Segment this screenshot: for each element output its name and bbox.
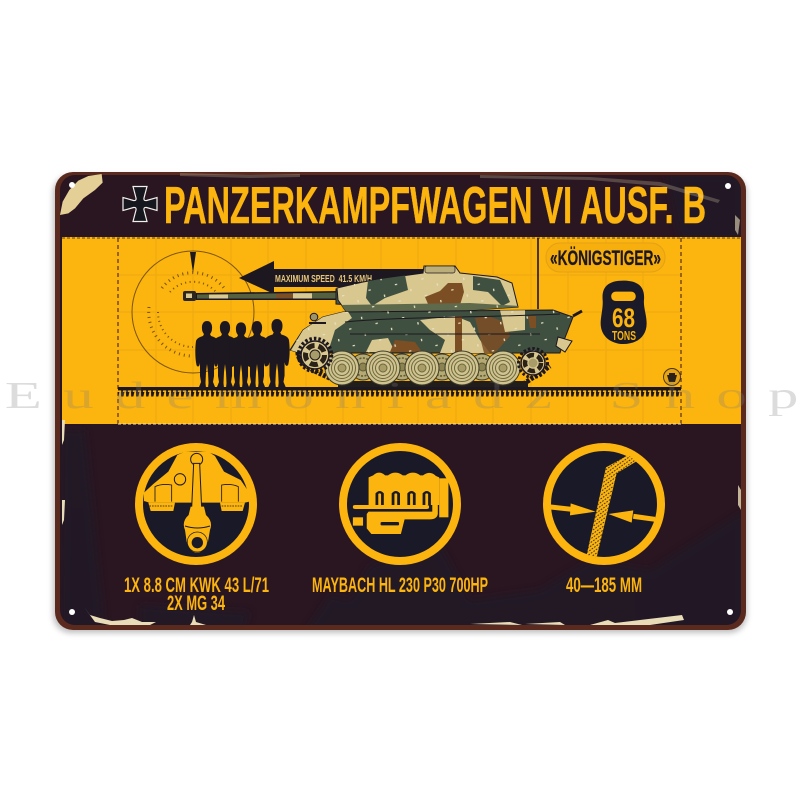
range dial <box>132 251 254 373</box>
blueprint grid <box>118 237 681 424</box>
turret <box>336 266 519 312</box>
drive sprocket <box>298 338 332 372</box>
tank nickname: «KÖNIGSTIGER» <box>550 245 661 270</box>
gun barrel <box>183 286 368 306</box>
upper range scale <box>162 273 224 288</box>
blueprint dashed frame <box>62 238 741 424</box>
title cross icon: Balkenkreuz <box>123 186 157 222</box>
armour label: 40—185 MM <box>566 574 642 597</box>
lower range scale <box>149 307 193 356</box>
chipped paint: bottom and side edges <box>62 173 741 625</box>
metal sign infographic <box>6 172 796 636</box>
track run <box>298 352 550 385</box>
icon: kettlebell weight <box>601 281 647 344</box>
lower inner scale <box>158 312 193 347</box>
headlamp <box>309 313 326 323</box>
hull <box>288 308 582 356</box>
chipped paint: top-left corner <box>60 174 103 215</box>
vertical callout line <box>537 238 539 309</box>
commander cupola <box>425 266 455 273</box>
armour icon panel <box>547 447 661 561</box>
weight value: 68 <box>612 303 635 333</box>
ground line with teeth <box>118 387 681 396</box>
speed label: MAXIMUM SPEED 41.5 KM/H <box>275 273 372 285</box>
engine label: MAYBACH HL 230 P30 700HP <box>312 574 488 597</box>
armament label: 1X 8.8 CM KWK 43 L/71 <box>124 574 269 597</box>
dark plate face <box>60 175 741 625</box>
hull rear details <box>556 337 572 352</box>
maximum speed arrow <box>239 261 423 294</box>
rusty metal plate <box>55 172 746 630</box>
icon: tank turret front view <box>144 452 249 553</box>
name badge <box>546 243 665 272</box>
engine icon panel <box>343 447 457 561</box>
road wheels <box>325 351 520 385</box>
icon: engine <box>353 473 448 534</box>
tank side view <box>183 264 582 387</box>
weathered navy blotches <box>60 172 745 640</box>
weight unit: TONS <box>612 328 636 343</box>
artist emblem <box>664 368 680 386</box>
machine gun label: 2X MG 34 <box>167 592 225 615</box>
icon: sloped armour plate with arrows <box>551 455 655 557</box>
watermark: Eudemoniadz Shop <box>5 374 798 416</box>
upper inner scale <box>170 282 216 292</box>
idler wheel <box>518 348 548 378</box>
dial needle <box>190 252 196 273</box>
sign shadow <box>53 175 747 633</box>
armament icon panel <box>139 447 253 561</box>
yellow specification band <box>62 237 741 424</box>
screw holes <box>69 182 733 615</box>
crew silhouettes <box>195 319 290 388</box>
